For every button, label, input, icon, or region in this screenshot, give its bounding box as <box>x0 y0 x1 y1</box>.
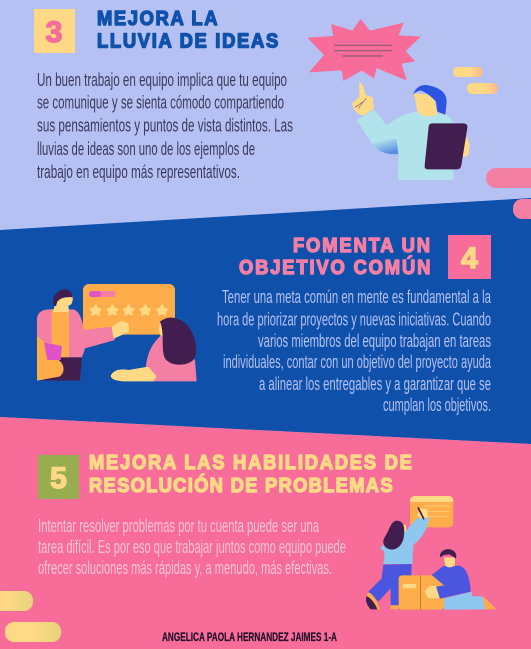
man kneeling <box>424 549 497 610</box>
heading: mejora la lluvia de ideas: MEJORA LA <box>97 8 218 30</box>
heading: mejora las habilidades: MEJORA LAS HABILIDADES DE <box>89 452 412 474</box>
text block: section 4 body <box>217 286 491 415</box>
panel: section 4 <box>37 235 491 415</box>
footer: author credit: ANGELICA PAOLA HERNANDEZ JAIMES 1-A <box>162 630 337 644</box>
text block: section 3 body: se comunique y se sienta cómodo compartiendo <box>37 92 284 112</box>
text block: section 5 body <box>38 515 346 578</box>
number badge 3 <box>34 9 75 53</box>
illustration: two people working <box>366 496 497 610</box>
number badge 4: 4 <box>461 242 478 275</box>
text block: section 5 body: ofrecer soluciones más rápidas y, a menudo, más efectivas. <box>38 557 332 578</box>
decorative pills bottom left <box>0 591 61 642</box>
woman seated <box>111 318 197 381</box>
heading: fomenta un objetivo comun: OBJETIVO COMÚN <box>239 256 430 279</box>
text block: section 3 body: trabajo en equipo más representativos. <box>37 161 240 182</box>
number badge 3: 3 <box>46 16 62 49</box>
panel: section 5 <box>0 452 497 644</box>
heading: mejora las habilidades: RESOLUCIÓN DE PROBLEMAS <box>89 474 393 497</box>
heading: fomenta un objetivo comun: FOMENTA UN <box>293 235 430 257</box>
cardboard box <box>399 575 444 610</box>
woman standing <box>366 507 429 609</box>
rating card <box>83 284 175 335</box>
illustration: woman with tablet <box>352 82 469 180</box>
heading: fomenta un objetivo comun <box>239 235 430 279</box>
text block: section 3 body: Un buen trabajo en equipo implica que tu equipo <box>37 69 287 90</box>
text block: section 3 body <box>37 69 293 182</box>
text block: section 3 body: lluvias de ideas son uno de los ejemplos de <box>37 138 255 159</box>
heading: mejora la lluvia de ideas <box>97 8 278 53</box>
text block: section 3 body: sus pensamientos y puntos de vista distintos. Las <box>37 114 293 136</box>
sticky note <box>410 496 453 527</box>
decorative pills top right <box>453 67 531 219</box>
text block: section 5 body: Intentar resolver problemas por tu cuenta puede ser una <box>38 515 319 536</box>
man pointing <box>37 289 129 381</box>
panel: section 3 <box>34 8 531 219</box>
number badge 4 <box>448 235 491 279</box>
illustration: rating board and two people <box>37 284 197 381</box>
icon: speech burst <box>307 19 421 81</box>
heading: mejora la lluvia de ideas: LLUVIA DE IDEAS <box>97 31 278 53</box>
heading: mejora las habilidades <box>89 452 412 497</box>
number badge 5 <box>38 455 79 499</box>
number badge 5: 5 <box>50 462 67 495</box>
